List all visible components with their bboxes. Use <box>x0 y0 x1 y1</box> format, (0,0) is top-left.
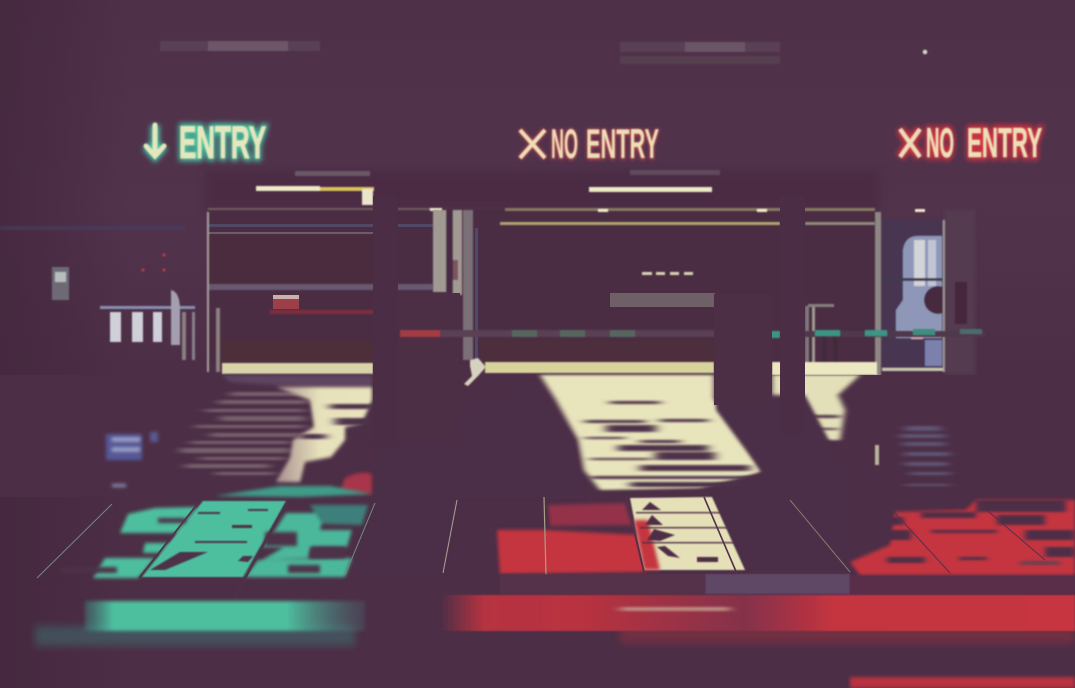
sign: no entry centre: ENTRY <box>586 120 659 167</box>
barrier arm right <box>750 329 985 338</box>
glint right <box>875 445 879 465</box>
left door frame and posts <box>207 210 473 372</box>
teal band on walkway <box>215 486 372 497</box>
red glint left <box>340 473 372 494</box>
left vignette <box>0 0 130 688</box>
sign: no entry right <box>900 119 1042 166</box>
small camera shape <box>464 358 486 386</box>
red reflection on road <box>440 595 1075 688</box>
cream reflection centre <box>540 375 762 490</box>
garage interior <box>208 210 878 365</box>
sign: no entry centre: NO <box>551 120 578 167</box>
barrier box left <box>398 293 460 443</box>
teal reflection on road <box>35 601 365 646</box>
left railing and car <box>0 226 195 360</box>
left pillar <box>373 196 398 446</box>
dark patches on cream tile <box>636 502 737 562</box>
floor reflections: red <box>440 497 1075 688</box>
dark patches on red tiles <box>862 500 1075 565</box>
blue reflection <box>106 432 158 487</box>
tile joints <box>139 502 287 597</box>
right glow: NO <box>926 119 954 166</box>
entry text: ENTRY <box>179 117 266 168</box>
right pillar <box>780 196 805 436</box>
barrier arm left <box>400 330 715 337</box>
pillar shadows <box>347 382 855 575</box>
small gate posts <box>805 304 837 377</box>
blue reflection right <box>900 426 950 486</box>
centre glow <box>520 121 659 169</box>
icon: x mark right <box>900 129 920 157</box>
dark streaks in cream <box>585 401 840 487</box>
ceiling lights <box>208 170 925 275</box>
pillars and barrier block <box>373 196 985 446</box>
bright threshold <box>222 362 877 375</box>
cream tile <box>630 497 745 570</box>
centre glow: ENTRY <box>586 121 659 169</box>
sign: entry <box>146 117 266 168</box>
cream reflection right <box>772 375 860 440</box>
icon: down arrow <box>146 125 164 156</box>
floor glare <box>222 375 372 386</box>
centre glow: NO <box>551 121 578 169</box>
barrier box right <box>714 294 772 405</box>
icon: x mark <box>520 130 545 158</box>
ceiling vents <box>160 41 927 64</box>
purple gutter <box>705 574 850 594</box>
red right tiles <box>850 500 1075 575</box>
dark marks on central tile <box>150 509 268 570</box>
right glass door <box>875 210 975 377</box>
teal tiles left <box>93 507 197 578</box>
entry glow: ENTRY <box>179 117 266 168</box>
floor reflections: light <box>0 362 1075 497</box>
red on cream tile <box>634 520 660 570</box>
dark patches on teal <box>62 518 345 573</box>
cream reflection left <box>276 387 372 482</box>
dark floor base <box>0 375 1075 497</box>
red left tile <box>497 503 645 574</box>
right glow <box>900 119 1042 166</box>
faint wet streaks left <box>180 392 308 475</box>
dark streaks left <box>300 404 375 439</box>
sign: no entry right: NO <box>926 119 954 166</box>
lintel band <box>205 170 880 210</box>
sign: no entry centre <box>520 120 659 169</box>
teal tiles <box>142 501 286 577</box>
teal tiles right <box>245 505 368 577</box>
floor reflections: teal <box>35 486 457 646</box>
